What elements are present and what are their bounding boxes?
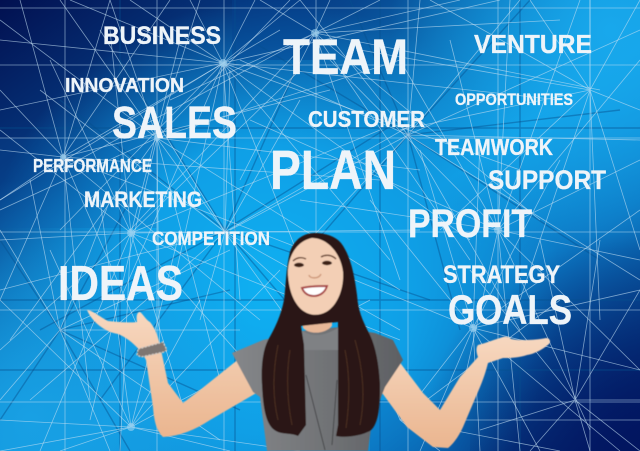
word: PROFIT: PROFIT: [408, 202, 532, 246]
word: PERFORMANCE: PERFORMANCE: [33, 156, 152, 176]
word: BUSINESS: BUSINESS: [103, 22, 221, 50]
grey top: [232, 327, 403, 451]
necklace: [306, 375, 337, 450]
word: SALES: SALES: [112, 97, 237, 148]
word: INNOVATION: INNOVATION: [65, 75, 184, 97]
word: COMPETITION: COMPETITION: [152, 229, 270, 250]
smiling mouth: [302, 286, 327, 296]
word: MARKETING: MARKETING: [84, 187, 202, 212]
word: STRATEGY: STRATEGY: [443, 261, 560, 289]
face: [288, 238, 343, 315]
turtleneck collar: [301, 327, 341, 350]
word: IDEAS: IDEAS: [58, 257, 183, 311]
long dark hair: [262, 233, 380, 437]
word: PLAN: PLAN: [270, 138, 396, 201]
woman figure: [87, 233, 550, 451]
word: TEAMWORK: TEAMWORK: [435, 134, 553, 160]
word: CUSTOMER: CUSTOMER: [308, 106, 425, 132]
node glow dots: [60, 29, 502, 431]
word: TEAM: TEAM: [283, 29, 408, 85]
word: VENTURE: VENTURE: [474, 29, 592, 59]
right arm and hand: [380, 337, 550, 448]
eyes: [294, 261, 332, 267]
bracelet: [137, 342, 167, 357]
hair highlights: [274, 340, 363, 428]
word: GOALS: GOALS: [448, 286, 572, 333]
left arm and hand: [87, 310, 258, 437]
word: OPPORTUNITIES: OPPORTUNITIES: [455, 90, 573, 109]
nose: [309, 274, 321, 278]
word: SUPPORT: SUPPORT: [488, 165, 606, 195]
eyebrows: [293, 255, 336, 261]
word cloud: [33, 22, 606, 333]
neck: [300, 305, 332, 333]
